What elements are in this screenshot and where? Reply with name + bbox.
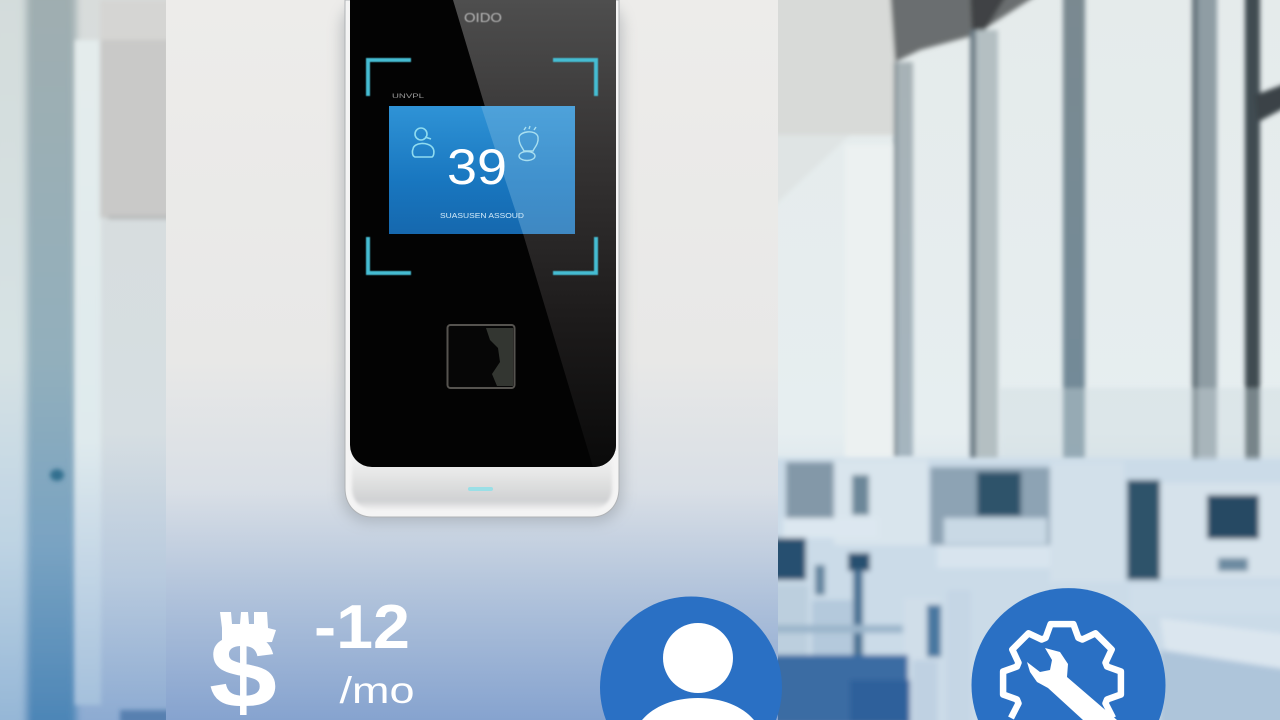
icon badge: gear and wrench: [972, 588, 1166, 720]
status light: [468, 487, 493, 491]
ceiling: [770, 0, 895, 135]
device: access control terminal: [345, 0, 619, 517]
background: blurred office with windows and desks: [770, 0, 1280, 720]
price callout: [209, 593, 414, 720]
glass reflection: [453, 0, 616, 467]
per month text: /mo: [340, 670, 414, 711]
chairs and floor: [770, 538, 806, 580]
logo text: OIDO: [464, 10, 502, 25]
gear outline: [1003, 624, 1121, 718]
fingerprint sensor: [448, 325, 514, 388]
small label: UNVPL: [392, 94, 425, 100]
icon badge: user: [600, 597, 782, 720]
black glass face: [350, 0, 616, 467]
background: left office strip: [0, 0, 170, 720]
price text: -12: [314, 593, 410, 662]
device shadow: [341, 0, 623, 522]
scan frame corners: [368, 60, 596, 273]
display screen: [389, 106, 575, 234]
columns: [896, 62, 913, 457]
wall panel: [166, 0, 778, 720]
icon: foot glyph: [519, 126, 538, 160]
skyline haze: [1000, 388, 1280, 460]
device body: [345, 0, 619, 517]
desks and monitors: [770, 458, 1280, 720]
wrench: [1027, 648, 1117, 720]
caption: SUASUSEN ASSOUD: [440, 213, 524, 220]
icon: person glyph: [412, 128, 434, 157]
reading value: 39: [447, 139, 507, 195]
